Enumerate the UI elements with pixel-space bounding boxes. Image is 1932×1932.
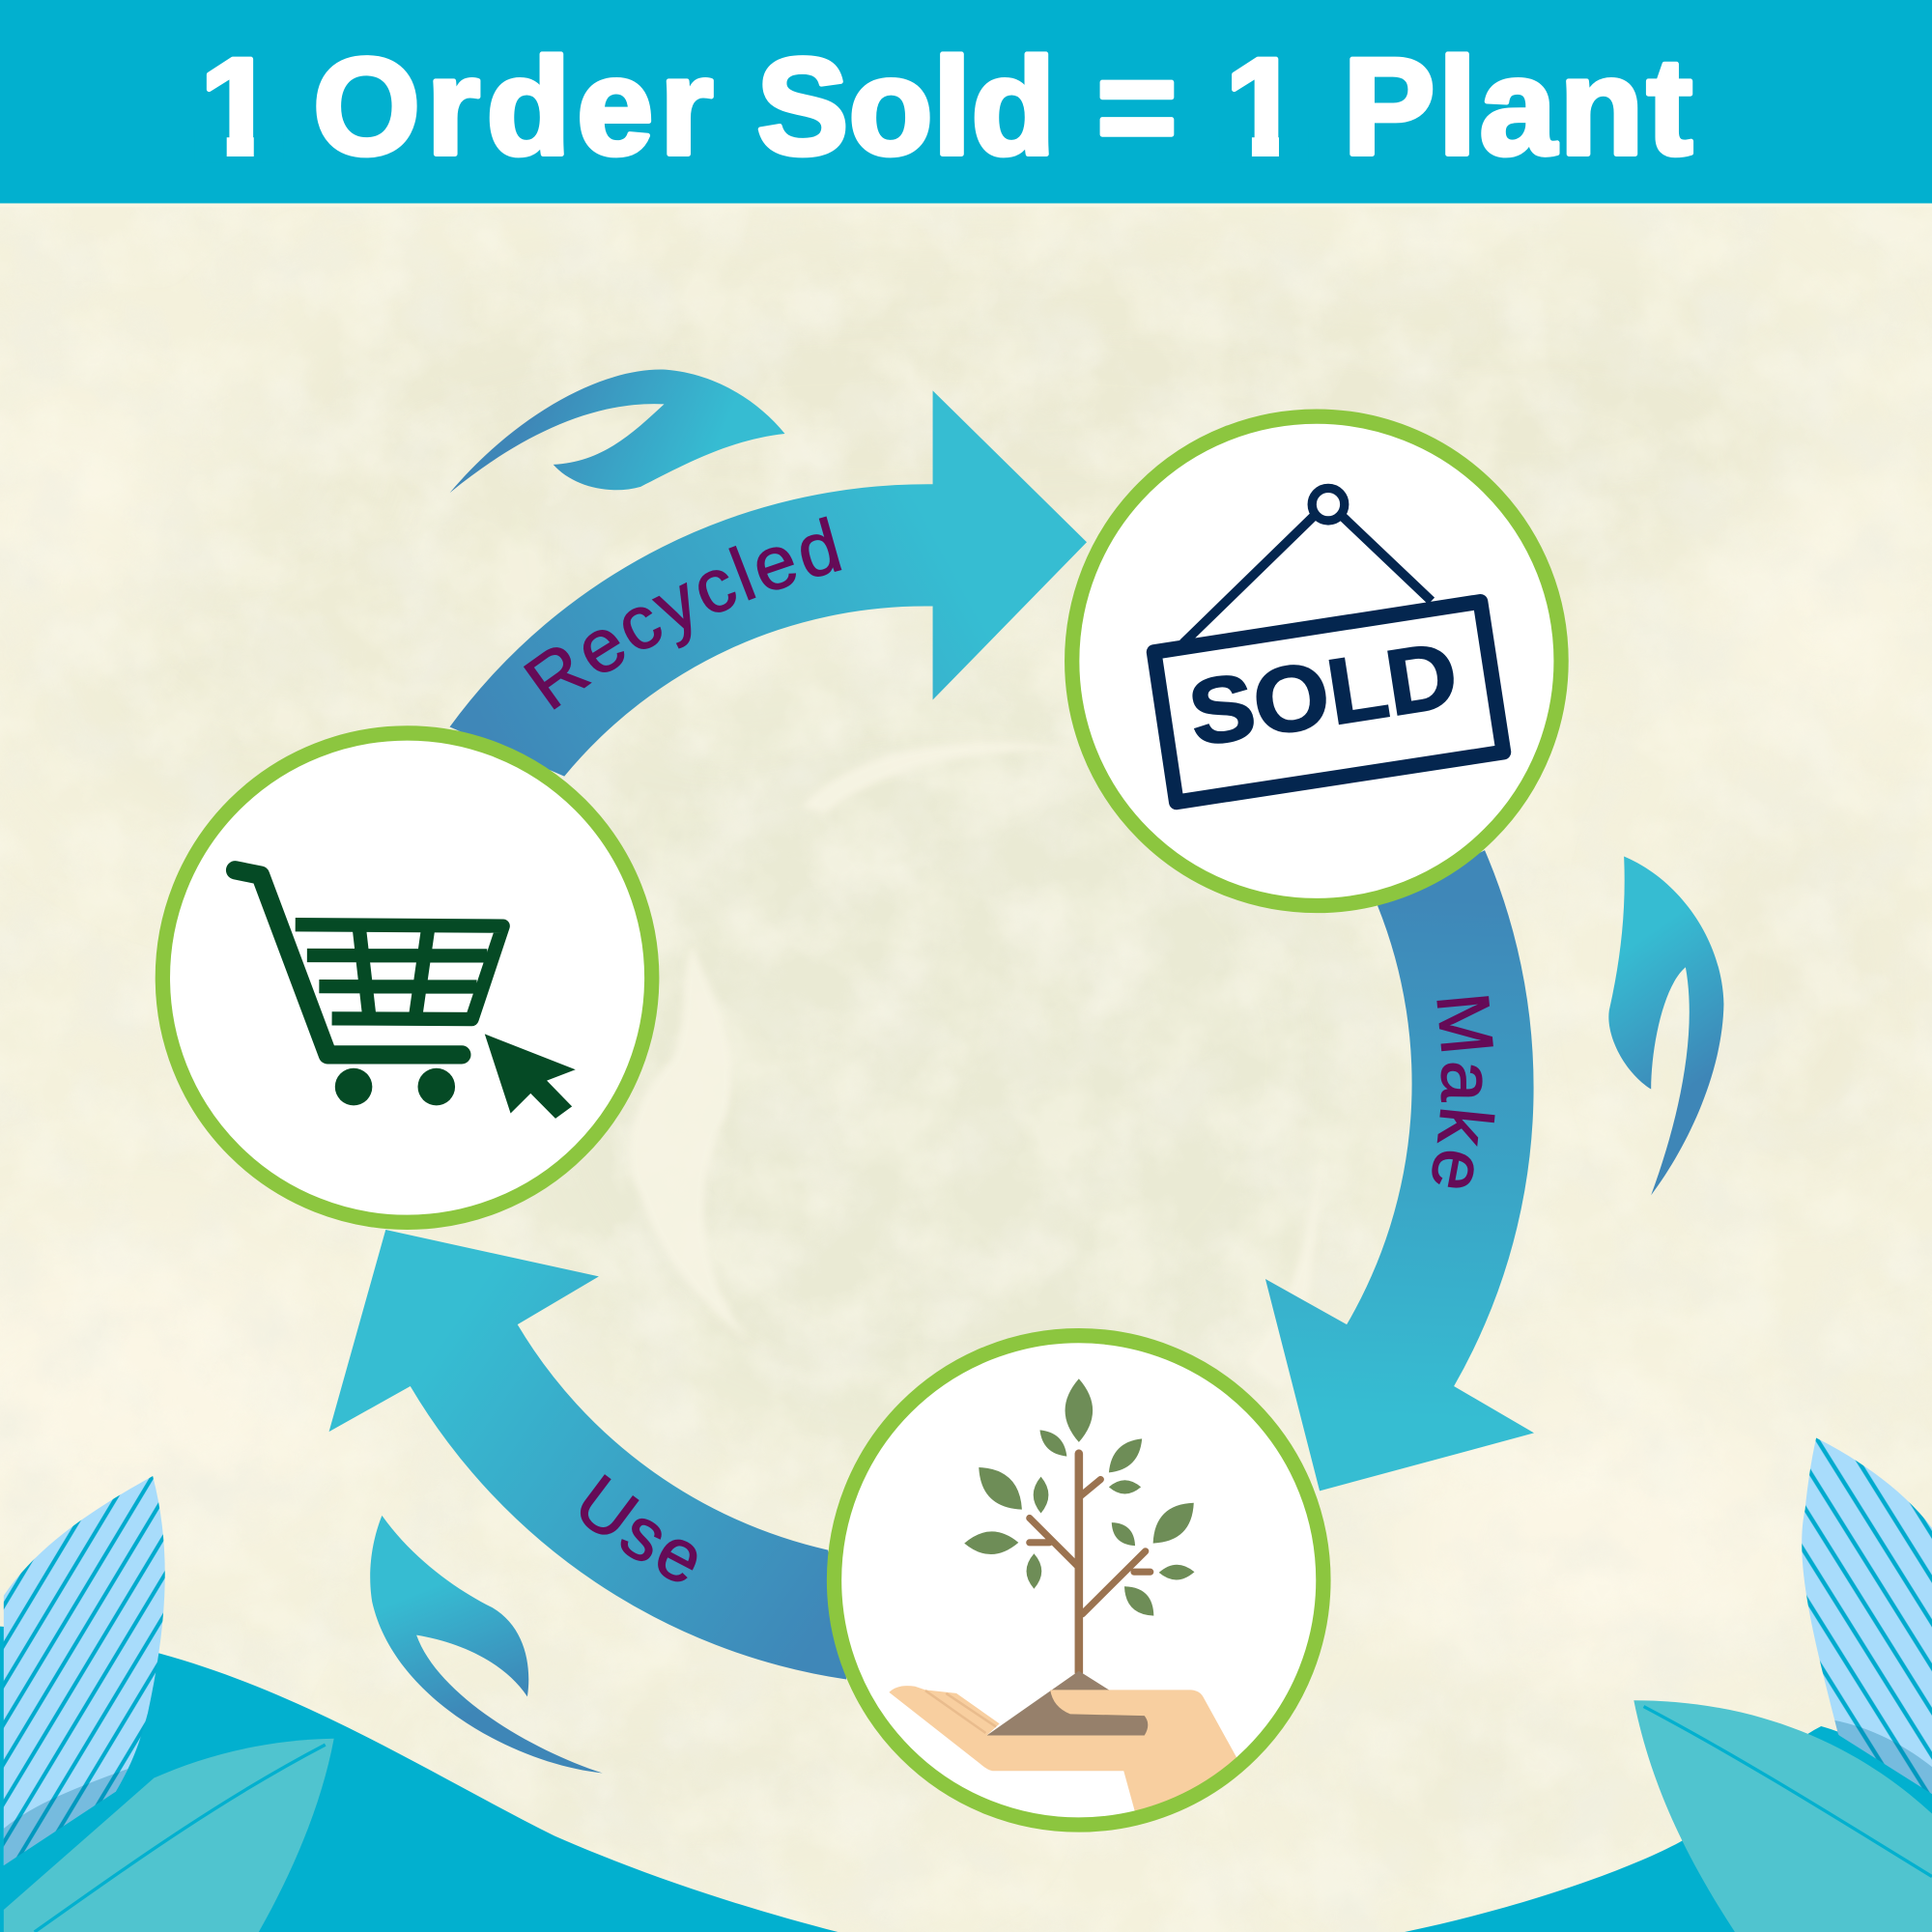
arrow: Use — [329, 1230, 846, 1680]
swoosh leaf: top — [450, 370, 784, 493]
title: Sold — [756, 30, 1056, 184]
title: 1 — [200, 30, 276, 184]
left striped leaf — [4, 1476, 165, 1868]
title: Plant — [1343, 30, 1695, 184]
circle: shopping cart — [162, 733, 652, 1222]
label: Use: Use — [580, 1474, 697, 1582]
right striped leaf — [1802, 1438, 1932, 1811]
header banner — [0, 0, 1932, 207]
title: = — [1096, 30, 1178, 184]
left light teal leaf — [4, 1739, 334, 1932]
title: 1 — [1225, 30, 1301, 184]
icon: hanging sold sign — [1154, 488, 1503, 802]
circle: plant in hand — [835, 1336, 1323, 1825]
circle: sold sign — [1072, 416, 1561, 906]
swoosh leaf: right — [1608, 856, 1723, 1195]
faint recycling swirl — [629, 742, 1324, 1392]
arrow: Recycled — [450, 390, 1087, 777]
label: Make: Make — [1432, 996, 1495, 1188]
icon: hanging sold sign: SOLD — [1182, 623, 1464, 766]
arrow: Make — [1265, 850, 1534, 1491]
icon: cart with cursor — [236, 870, 576, 1119]
icon: sapling held in hand — [889, 1378, 1239, 1821]
right light teal leaf — [1634, 1700, 1932, 1932]
label: Recycled: Recycled — [524, 516, 842, 710]
swoosh leaf: bottom left — [370, 1516, 603, 1773]
bottom teal wave — [0, 1627, 1932, 1932]
title: Order — [313, 30, 720, 184]
